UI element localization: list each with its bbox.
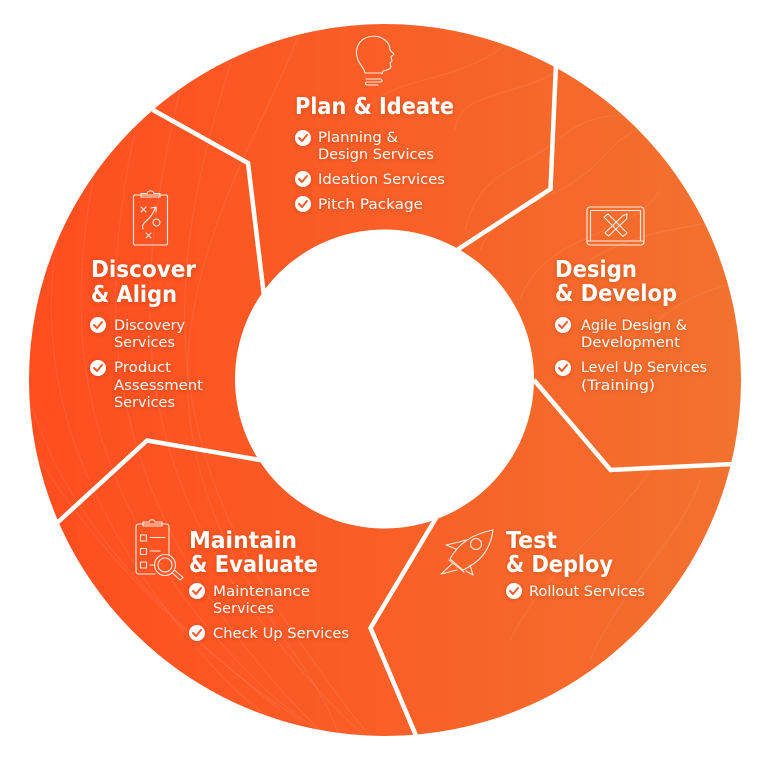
panel: Discover & Align: & Align xyxy=(91,282,177,308)
checklist: Services xyxy=(114,335,175,351)
panel: Design & Develop xyxy=(555,207,707,394)
panel: Discover & Align xyxy=(90,191,204,411)
checklist: (Training) xyxy=(581,378,655,394)
checklist: Development xyxy=(581,335,681,351)
checklist: Services xyxy=(114,395,175,411)
checklist: Assessment xyxy=(114,378,204,394)
panel: Plan & Ideate xyxy=(295,36,454,213)
panel: Maintain & Evaluate: & Evaluate xyxy=(189,552,318,578)
panel: Test & Deploy: & Deploy xyxy=(506,552,613,578)
checklist: Pitch Package xyxy=(318,197,423,213)
checklist: Services xyxy=(213,601,274,617)
icon: strategy clipboard xyxy=(134,191,168,245)
icon: tablet with ruler and pencil xyxy=(587,207,644,245)
checklist: Maintenance xyxy=(213,584,310,600)
panel: Design & Develop: & Develop xyxy=(555,281,677,307)
checklist: Ideation Services xyxy=(318,172,445,188)
segment dividers xyxy=(57,64,734,738)
heading: Plan & Ideate xyxy=(295,94,454,120)
panel: Maintain & Evaluate xyxy=(136,520,349,642)
heading: Discover xyxy=(91,257,197,283)
heading: Design xyxy=(555,257,637,283)
checklist: Discovery xyxy=(114,318,185,334)
checklist xyxy=(295,130,445,213)
checklist: Rollout Services xyxy=(529,584,645,600)
checklist: Product xyxy=(114,360,172,376)
checklist: Design Services xyxy=(318,147,434,163)
icon: checklist with magnifier xyxy=(136,520,183,580)
checklist: Level Up Services xyxy=(581,360,707,376)
checklist xyxy=(90,317,204,411)
checklist xyxy=(555,317,707,394)
icon: rocket xyxy=(441,530,493,575)
checklist xyxy=(189,583,349,642)
heading: Test xyxy=(506,528,557,554)
checklist: Planning & xyxy=(318,130,398,146)
checklist: Check Up Services xyxy=(213,626,349,642)
checklist: Agile Design & xyxy=(581,318,687,334)
panel: Test & Deploy xyxy=(441,528,645,600)
icon: lightbulb head xyxy=(356,36,394,85)
heading: Maintain xyxy=(189,528,297,554)
